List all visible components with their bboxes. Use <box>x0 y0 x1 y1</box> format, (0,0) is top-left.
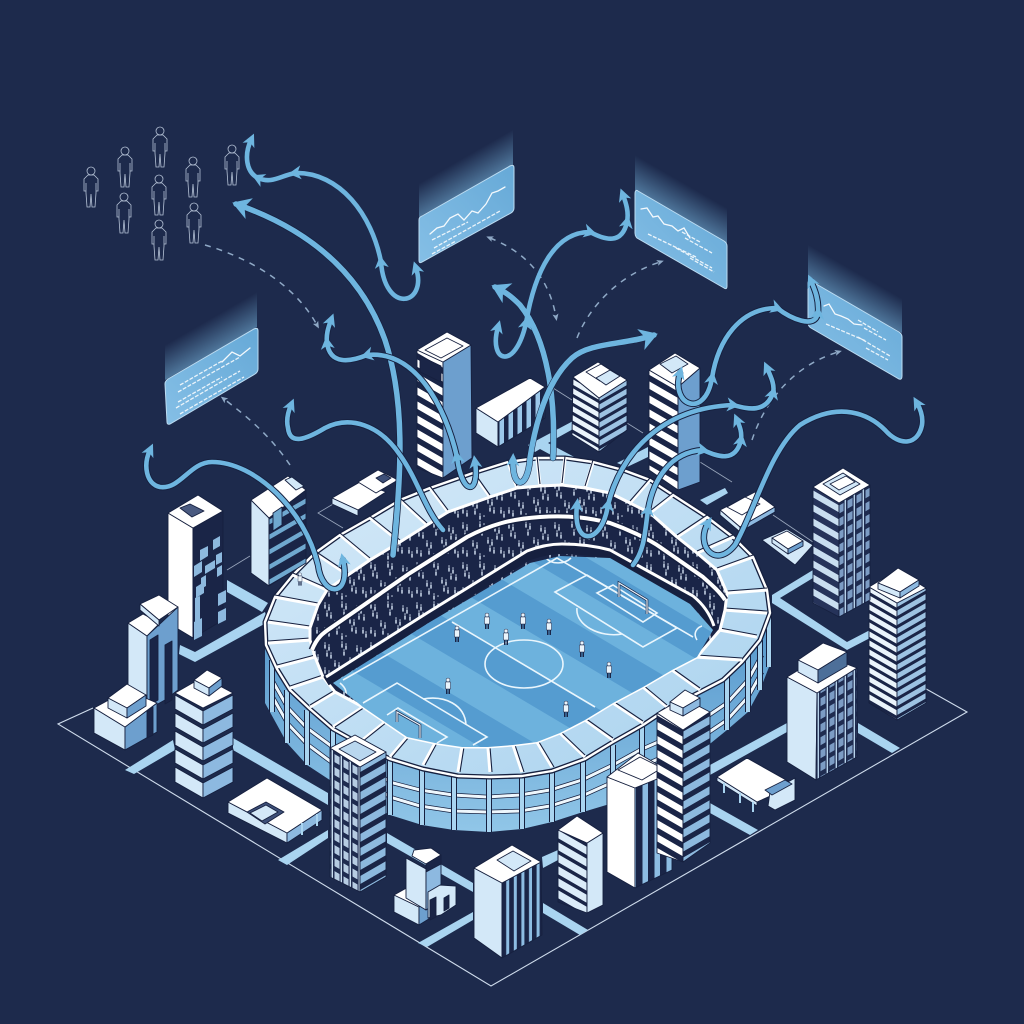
data card: top centre <box>419 130 514 263</box>
data card: top right <box>635 155 727 289</box>
building: grid tower, upper right <box>813 468 870 617</box>
building: front-left tower <box>330 735 386 892</box>
building: mid tower with doorway <box>128 595 178 710</box>
arrow: far right sweep <box>704 403 922 555</box>
building: layered block, rear <box>572 362 627 452</box>
building: white pixel tower <box>168 495 226 640</box>
crowd of people icons <box>84 127 239 260</box>
football pitch <box>333 556 713 747</box>
building: front striped tower <box>474 845 542 958</box>
building: low wide pavilion <box>228 778 322 843</box>
goals <box>397 583 647 738</box>
data card: far right <box>808 245 902 379</box>
players <box>446 613 612 717</box>
arrow: over the rear tower <box>327 320 476 487</box>
building: horizontally striped block <box>558 816 603 913</box>
ground outline <box>58 677 967 986</box>
stadium roof ring <box>265 458 770 777</box>
building: stacked tower, far right <box>869 568 926 720</box>
thin plot lines <box>227 388 813 570</box>
building: small stepped block <box>394 848 456 925</box>
arrow: centre hook to top right <box>496 195 628 357</box>
building: small pavilion, right <box>717 758 795 812</box>
arrow: centre upward <box>495 287 554 458</box>
field edge band <box>326 549 714 681</box>
arrow: rising from the stands <box>633 420 741 565</box>
dashed connectors <box>205 238 838 465</box>
stadium columns <box>272 615 769 832</box>
building: long low block, rear <box>476 378 545 447</box>
stand tier divider <box>312 516 725 650</box>
roof segments <box>268 458 767 772</box>
arrow: to far right card <box>678 281 818 404</box>
arrow: mid-left loop <box>287 405 443 530</box>
building: low complex, rear left <box>332 470 398 516</box>
stadium facade <box>265 631 769 832</box>
flow arrows <box>146 140 922 589</box>
building: striped block by the roof <box>251 476 306 586</box>
road network <box>125 420 900 947</box>
building: striped tower, rear right <box>649 353 700 490</box>
arrow: across right tower <box>576 368 774 536</box>
stands with crowd <box>310 485 727 747</box>
arrow: big sweep to upper left <box>236 204 400 555</box>
figure on the roof <box>298 573 302 586</box>
arrow: big rightward <box>513 335 654 482</box>
building: white tower with vertical stripes <box>607 753 672 888</box>
building: striped tower, front right <box>657 690 710 862</box>
building: stacked slab tower <box>175 670 233 798</box>
building: window grid tower, right <box>787 643 857 780</box>
stadium <box>260 456 775 840</box>
building: low box with block <box>94 684 157 750</box>
pitch markings <box>340 558 702 745</box>
arrow: top hook <box>247 140 418 299</box>
building: tall striped tower, rear <box>417 332 472 478</box>
arrow: left hook <box>146 450 345 589</box>
plinth buildings, rear right <box>720 492 813 565</box>
data card: lower left <box>165 292 258 424</box>
